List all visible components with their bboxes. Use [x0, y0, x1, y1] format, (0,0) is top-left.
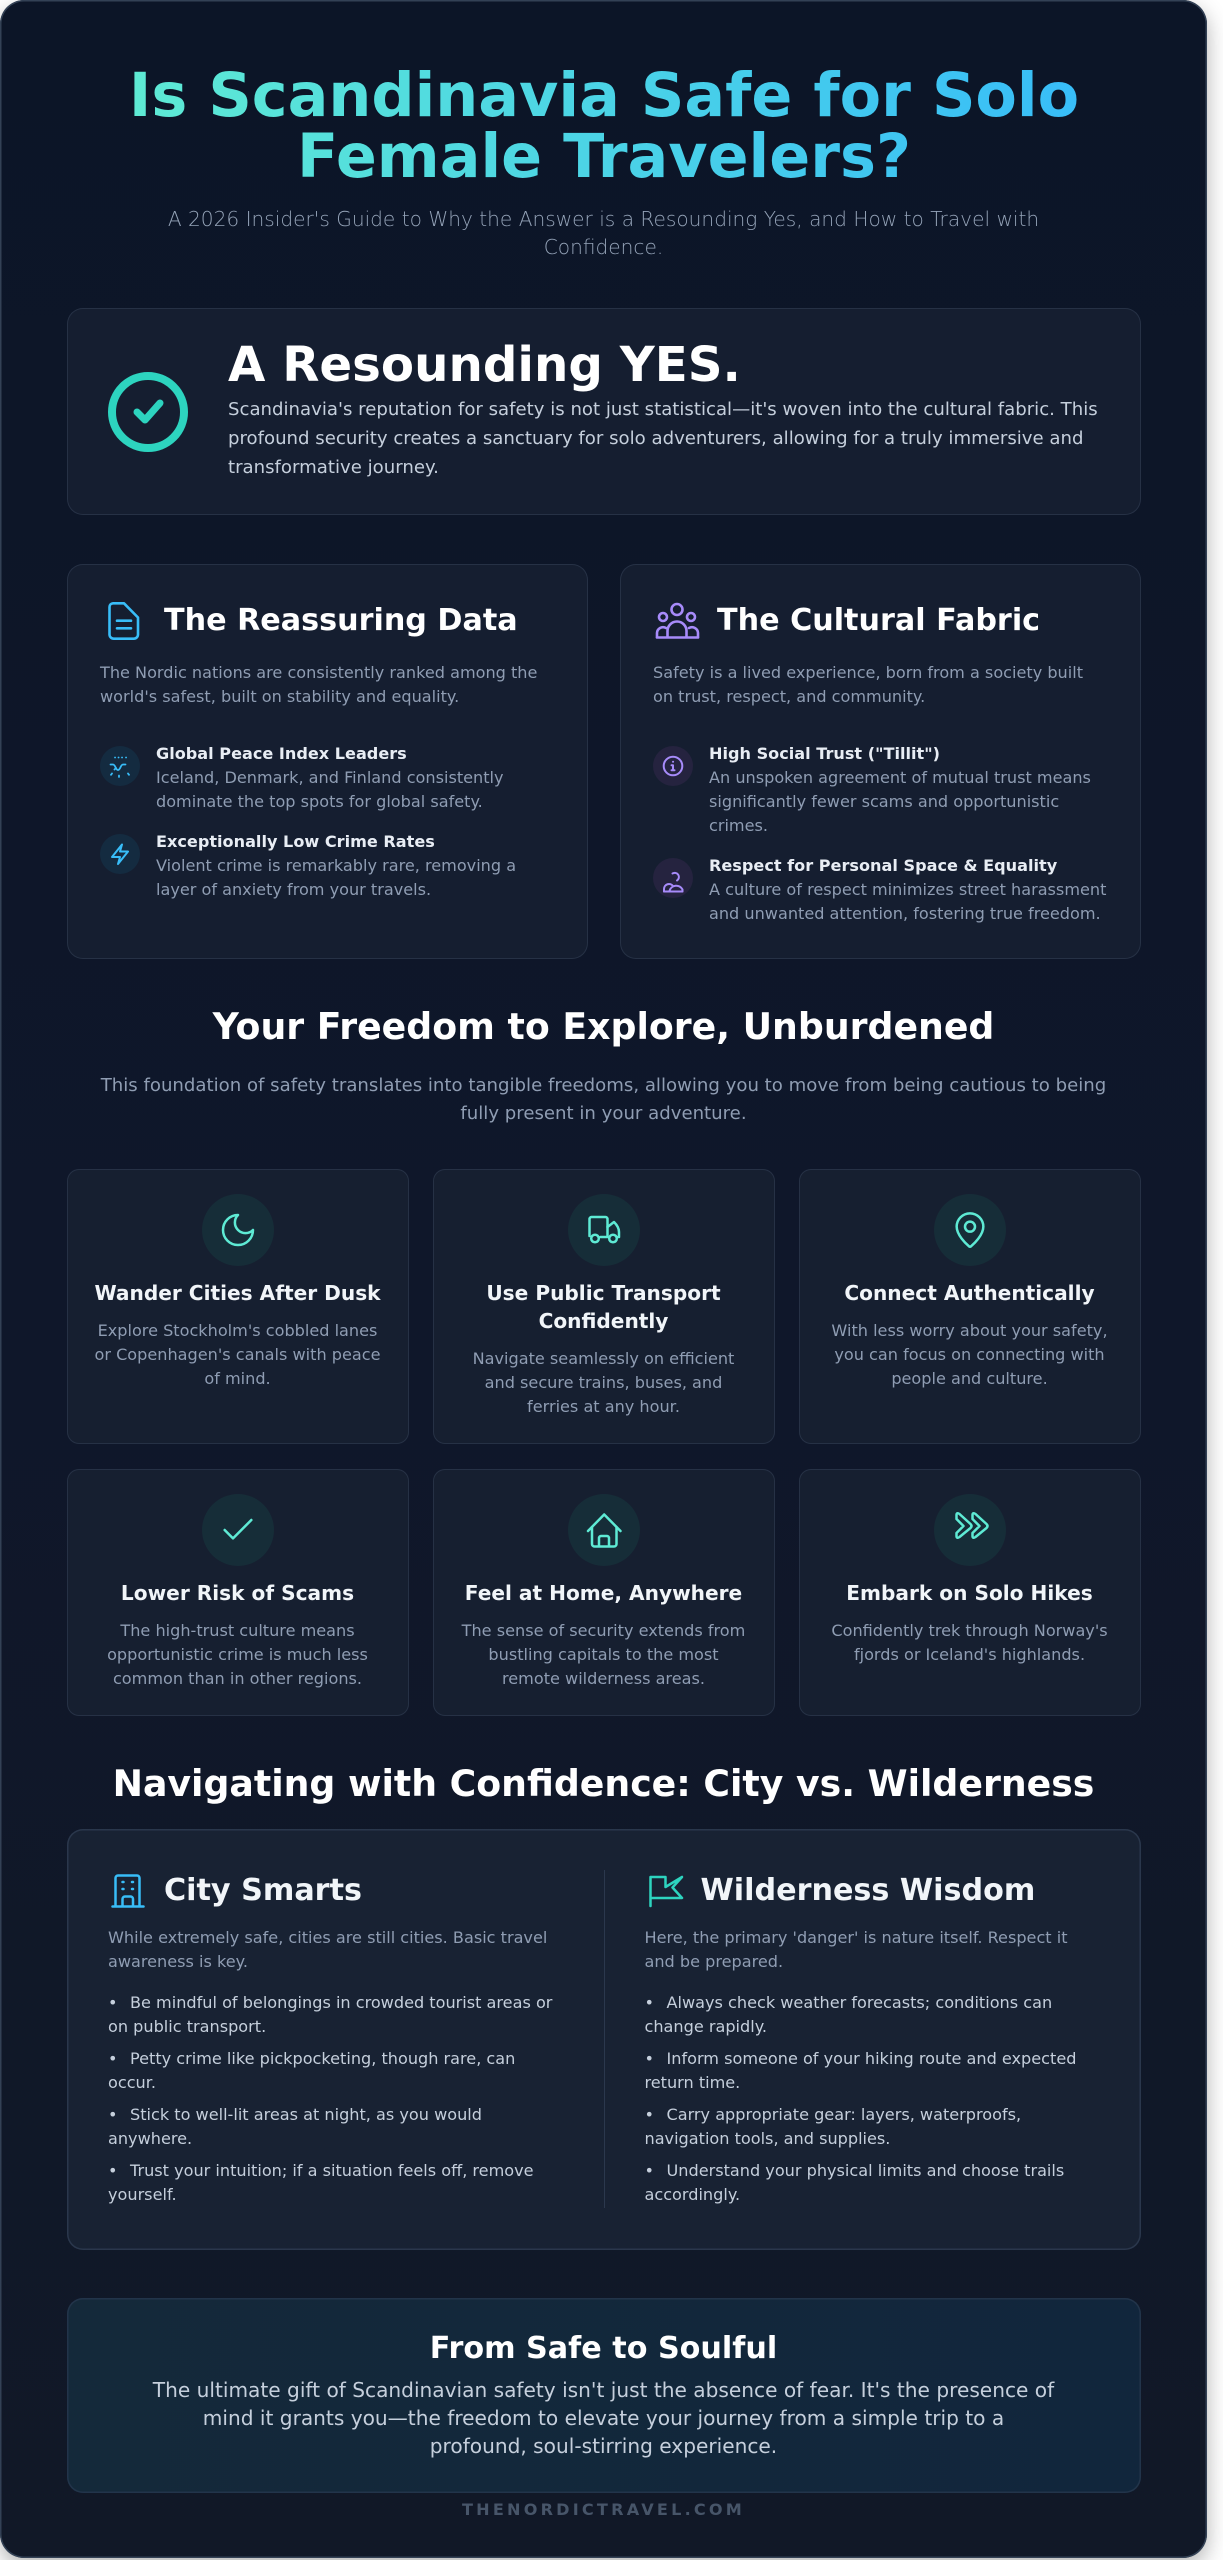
list: wilderness tips: change rapidly.: [644, 2017, 767, 2036]
item: respect for personal space: [653, 856, 1106, 923]
card title: Confidently: [539, 1309, 668, 1333]
icon: peace index: [100, 746, 140, 786]
heading: city smarts: City Smarts: [164, 1872, 362, 1908]
text: safety reputation: Scandinavia's reputation for safety is not just statistical—it's woven into the cultural fabric. This: [228, 399, 1098, 420]
text: closing message: mind it grants you—the freedom to elevate your journey from a simple trip to a: [203, 2406, 1004, 2430]
text: closing message: [152, 2378, 1055, 2458]
card text: Navigate seamlessly on efficient: [473, 1349, 734, 1368]
card text: [94, 1321, 381, 1388]
text: data intro: world's safest, built on stability and equality.: [100, 686, 459, 706]
card: solo hikes: [798, 1469, 1140, 1716]
card text: common than in other regions.: [113, 1669, 362, 1688]
list: city tips: Stick to well-lit areas at night, as you would: [130, 2105, 482, 2124]
column: wilderness wisdom: [644, 1872, 1076, 2204]
text: data intro: The Nordic nations are consistently ranked among the: [100, 662, 537, 682]
card title: [486, 1281, 721, 1333]
text: city intro: awareness is key.: [108, 1952, 248, 1971]
panel: city vs wilderness: [66, 1829, 1140, 2250]
icon: lightning bolt: [100, 834, 140, 874]
label: exceptionally low crime rates: Exceptionally Low Crime Rates: [156, 832, 435, 851]
list: wilderness tips: accordingly.: [644, 2185, 740, 2204]
card text: bustling capitals to the most: [488, 1645, 719, 1664]
heading: a resounding yes: A Resounding YES.: [228, 336, 741, 392]
list: city tips: •: [108, 2161, 118, 2180]
card text: [462, 1621, 745, 1688]
list: city tips: •: [108, 2105, 118, 2124]
card text: Explore Stockholm's cobbled lanes: [98, 1321, 377, 1340]
subtitle: Confidence.: [544, 234, 663, 258]
panel: the cultural fabric: [620, 564, 1140, 959]
card: public transport: [432, 1169, 774, 1444]
card text: opportunistic crime is much less: [107, 1645, 368, 1664]
panel: the reassuring data: [66, 564, 588, 959]
text: closing message: The ultimate gift of Scandinavian safety isn't just the absence of fear. It's the presence of: [153, 2378, 1054, 2402]
panel: from safe to soulful: [66, 2298, 1140, 2493]
label: respect for personal space: Respect for Personal Space & Equality: [709, 856, 1057, 875]
card text: remote wilderness areas.: [502, 1669, 705, 1688]
text: peace index description: dominate the top spots for global safety.: [156, 792, 483, 811]
card text: ferries at any hour.: [527, 1397, 680, 1416]
text: freedom intro: [100, 1074, 1106, 1124]
text: data intro: [100, 662, 537, 706]
text: freedom intro: fully present in your adventure.: [460, 1102, 747, 1124]
text: crime description: layer of anxiety from your travels.: [156, 880, 431, 899]
card text: people and culture.: [891, 1369, 1048, 1388]
card text: [107, 1621, 368, 1688]
panel: a resounding yes: [66, 308, 1140, 515]
list: wilderness tips: Understand your physical limits and choose trails: [666, 2161, 1064, 2180]
list: city tips: yourself.: [108, 2185, 177, 2204]
card text: With less worry about your safety,: [831, 1321, 1108, 1340]
card text: The high-trust culture means: [120, 1621, 355, 1640]
icon: check: [202, 1494, 274, 1566]
heading: navigating with confidence: Navigating with Confidence: City vs. Wilderness: [113, 1762, 1094, 1805]
list: city tips: Petty crime like pickpocketing, though rare, can: [130, 2049, 515, 2068]
subtitle: A 2026 Insider's Guide to Why the Answer is a Resounding Yes, and How to Travel with: [168, 206, 1039, 230]
list: city tips: [108, 1993, 552, 2204]
icon: truck: [568, 1194, 640, 1266]
card: connect authentically: [798, 1169, 1140, 1444]
list: city tips: •: [108, 2049, 118, 2068]
card text: [831, 1621, 1108, 1664]
list: city tips: occur.: [108, 2073, 156, 2092]
icon: flag: [649, 1876, 684, 1908]
footer: website: THENORDICTRAVEL.COM: [462, 2500, 745, 2519]
text: peace index description: Iceland, Denmark, and Finland consistently: [156, 768, 504, 787]
icon: map pin: [934, 1194, 1006, 1266]
subtitle: [168, 206, 1039, 258]
heading: from safe to soulful: From Safe to Soulful: [430, 2330, 777, 2366]
icon: home: [568, 1494, 640, 1566]
card text: and secure trains, buses, and: [485, 1373, 722, 1392]
card text: you can focus on connecting with: [834, 1345, 1105, 1364]
heading: the reassuring data: The Reassuring Data: [164, 602, 518, 638]
card text: of mind.: [204, 1369, 271, 1388]
heading: the cultural fabric: The Cultural Fabric: [717, 602, 1040, 638]
column: city smarts: [108, 1872, 552, 2204]
text: wilderness intro: [644, 1928, 1068, 1971]
text: respect description: [709, 880, 1106, 923]
card text: Confidently trek through Norway's: [831, 1621, 1108, 1640]
list: wilderness tips: Always check weather forecasts; conditions can: [666, 1993, 1052, 2012]
icon: document: [108, 602, 140, 640]
title: Female Travelers?: [297, 122, 911, 192]
list: wilderness tips: Inform someone of your hiking route and expected: [666, 2049, 1076, 2068]
text: crime description: [156, 856, 516, 899]
card text: [831, 1321, 1108, 1388]
heading: your freedom to explore: Your Freedom to Explore, Unburdened: [213, 1005, 994, 1048]
icon: people: [656, 602, 700, 639]
card text: The sense of security extends from: [462, 1621, 745, 1640]
list: city tips: Be mindful of belongings in crowded tourist areas or: [130, 1993, 552, 2012]
card title: Lower Risk of Scams: [121, 1581, 354, 1605]
icon: person: [653, 858, 693, 898]
item: high social trust: [653, 744, 1091, 835]
card text: fjords or Iceland's highlands.: [854, 1645, 1085, 1664]
text: crime description: Violent crime is remarkably rare, removing a: [156, 856, 516, 875]
label: global peace index leaders: Global Peace Index Leaders: [156, 744, 407, 763]
list: city tips: anywhere.: [108, 2129, 192, 2148]
text: trust description: significantly fewer scams and opportunistic: [709, 792, 1059, 811]
text: city intro: While extremely safe, cities are still cities. Basic travel: [108, 1928, 547, 1947]
card text: or Copenhagen's canals with peace: [94, 1345, 381, 1364]
icon: moon: [202, 1194, 274, 1266]
icon: check circle: [108, 372, 188, 452]
icon: info: [653, 746, 693, 786]
item: global peace index: [100, 744, 504, 811]
text: safety reputation: profound security creates a sanctuary for solo adventurers, allowing for a truly immersive and: [228, 428, 1083, 449]
text: safety reputation: [228, 399, 1098, 478]
card: lower risk of scams: [66, 1469, 408, 1716]
text: culture intro: [653, 662, 1083, 706]
list: wilderness tips: [644, 1993, 1076, 2204]
card: feel at home: [432, 1469, 774, 1716]
list: wilderness tips: Carry appropriate gear: layers, waterproofs,: [666, 2105, 1021, 2124]
text: freedom intro: This foundation of safety translates into tangible freedoms, allowing you to move from being cautious to being: [101, 1074, 1106, 1096]
card title: Embark on Solo Hikes: [846, 1581, 1093, 1605]
card title: Use Public Transport: [486, 1281, 721, 1305]
icon: double chevrons: [934, 1494, 1006, 1566]
text: peace index description: [156, 768, 504, 811]
list: wilderness tips: •: [644, 2105, 654, 2124]
list: city tips: •: [108, 1993, 118, 2012]
card title: Wander Cities After Dusk: [94, 1281, 381, 1305]
label: high social trust: High Social Trust ("Tillit"): [709, 744, 940, 763]
text: wilderness intro: Here, the primary 'danger' is nature itself. Respect it: [644, 1928, 1068, 1947]
text: trust description: crimes.: [709, 816, 768, 835]
text: respect description: A culture of respect minimizes street harassment: [709, 880, 1106, 899]
text: respect description: and unwanted attention, fostering true freedom.: [709, 904, 1101, 923]
text: city intro: [108, 1928, 547, 1971]
list: city tips: on public transport.: [108, 2017, 266, 2036]
list: wilderness tips: navigation tools, and supplies.: [644, 2129, 890, 2148]
text: culture intro: Safety is a lived experience, born from a society built: [653, 662, 1083, 682]
card title: Connect Authentically: [844, 1281, 1095, 1305]
text: wilderness intro: and be prepared.: [644, 1952, 783, 1971]
text: trust description: [709, 768, 1091, 835]
icon: building: [111, 1874, 145, 1908]
text: trust description: An unspoken agreement of mutual trust means: [709, 768, 1091, 787]
title: Is Scandinavia Safe for Solo: [129, 61, 1079, 131]
card title: Feel at Home, Anywhere: [465, 1581, 742, 1605]
list: wilderness tips: return time.: [644, 2073, 740, 2092]
text: closing message: profound, soul-stirring experience.: [430, 2434, 777, 2458]
card text: [473, 1349, 734, 1416]
heading: wilderness wisdom: Wilderness Wisdom: [700, 1872, 1035, 1908]
list: city tips: Trust your intuition; if a situation feels off, remove: [130, 2161, 534, 2180]
list: wilderness tips: •: [644, 2049, 654, 2068]
title: [128, 66, 1080, 187]
text: culture intro: on trust, respect, and community.: [653, 686, 925, 706]
text: safety reputation: transformative journey.: [228, 457, 439, 478]
list: wilderness tips: •: [644, 2161, 654, 2180]
card: wander cities: [66, 1169, 408, 1444]
item: low crime rates: [100, 832, 516, 899]
list: wilderness tips: •: [644, 1993, 654, 2012]
